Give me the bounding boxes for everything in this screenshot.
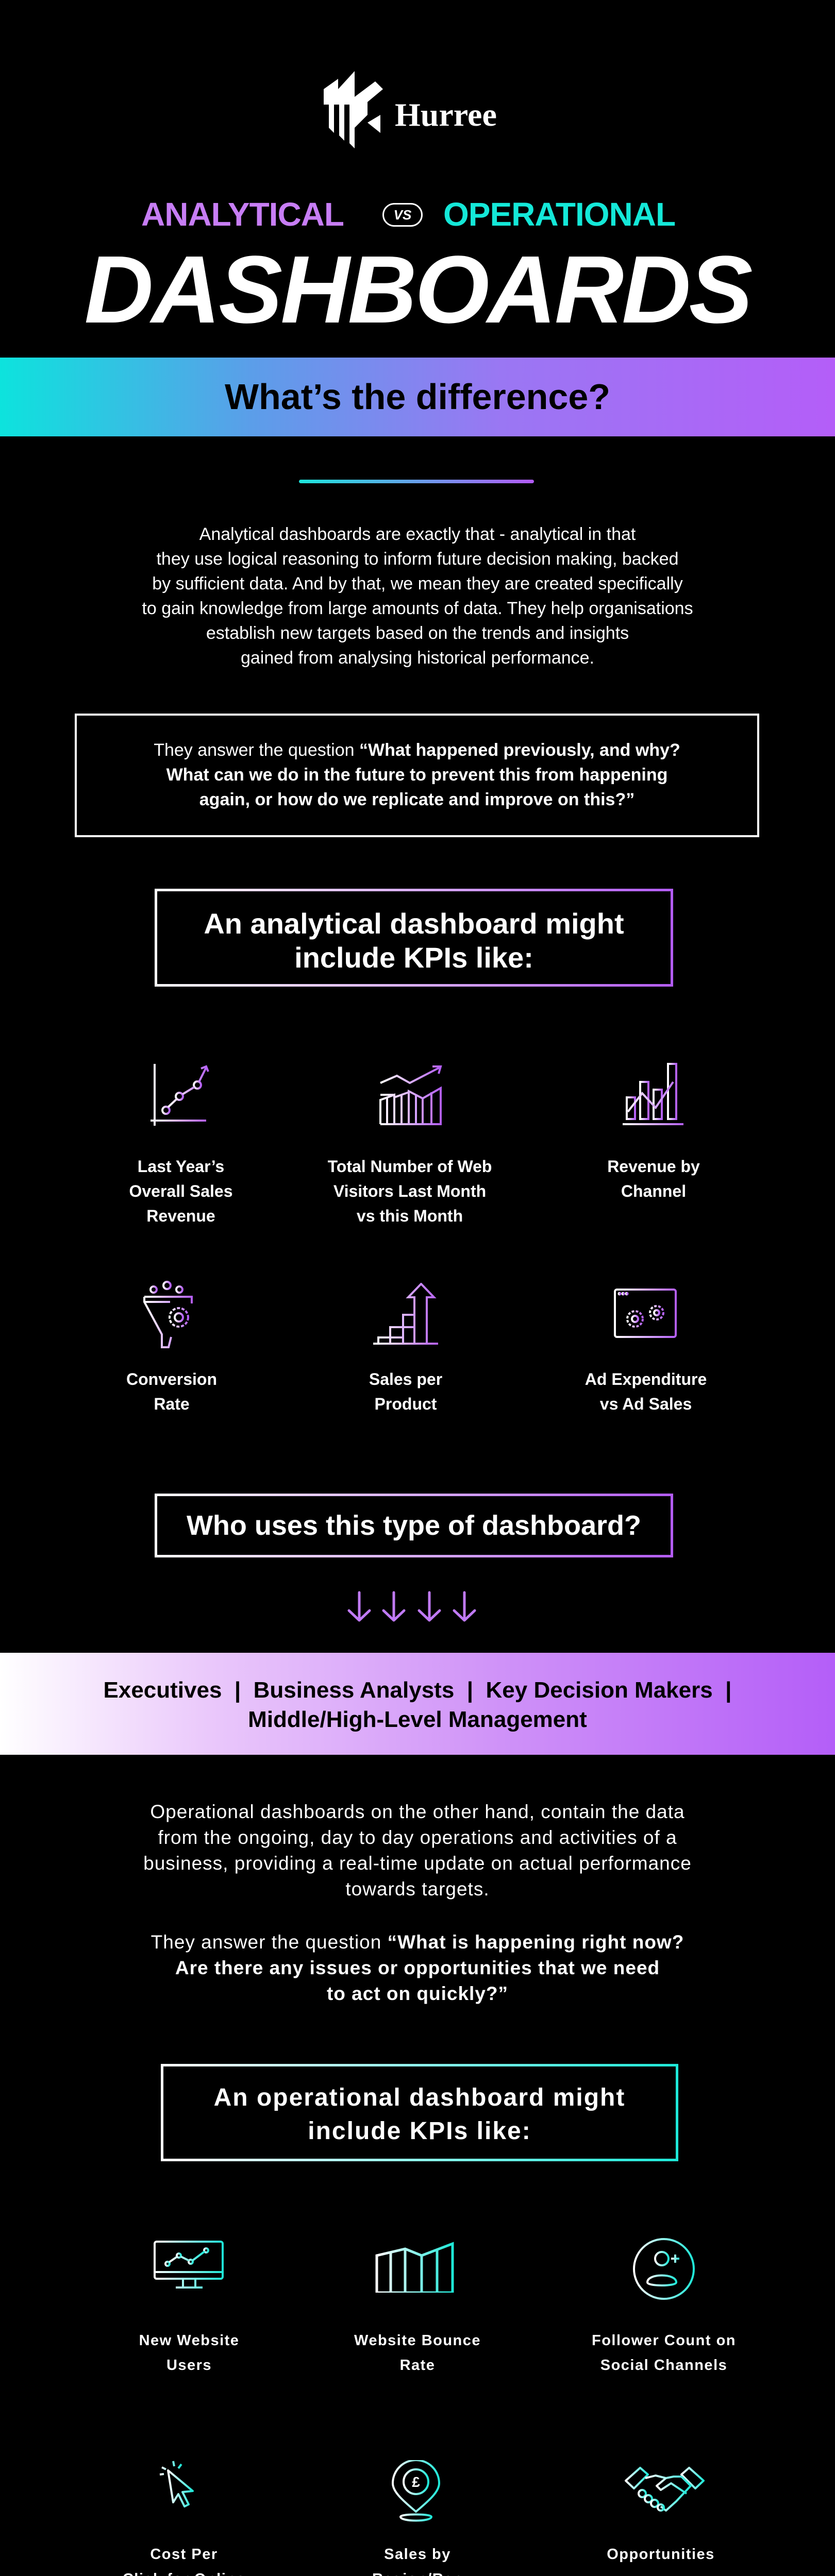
label: Website Bounce Rate: Rate xyxy=(400,2357,435,2374)
text: analytical description: gained from analysing historical performance. xyxy=(241,648,594,668)
text: operational question: Are there any issues or opportunities that we need xyxy=(175,1957,660,1978)
label: Last Year's Overall Sales Revenue: Overall Sales xyxy=(129,1182,233,1200)
callout: analytical question: again, or how do we replicate and improve on this?” xyxy=(199,790,634,809)
text: analytical description xyxy=(142,524,693,668)
label: Follower Count on Social Channels xyxy=(592,2332,736,2374)
label: Revenue by Channel: Revenue by xyxy=(607,1157,700,1176)
label: New Website Users: New Website xyxy=(139,2332,239,2349)
callout: analytical question: They answer the question “What happened previously, and why? xyxy=(154,740,680,760)
label: Conversion Rate: Conversion xyxy=(126,1370,217,1388)
label: Last Year's Overall Sales Revenue xyxy=(129,1157,233,1225)
icon: location pound xyxy=(392,2460,440,2521)
title: analytical vs operational xyxy=(141,196,675,233)
label: Cost Per Click: Cost Per xyxy=(150,2546,218,2563)
label: Conversion Rate xyxy=(126,1370,217,1413)
label: Total Number of Web Visitors: Visitors Last Month xyxy=(333,1182,486,1200)
logo: Hurree top xyxy=(324,71,497,148)
heading box: operational KPIs: include KPIs like: xyxy=(308,2117,531,2145)
label: Cost Per Click xyxy=(123,2546,245,2576)
icon: handshake xyxy=(625,2467,705,2512)
heading box: analytical KPIs: include KPIs like: xyxy=(294,941,533,974)
label: Website Bounce Rate: Website Bounce xyxy=(354,2332,481,2349)
heading box: analytical KPIs: An analytical dashboard might xyxy=(204,907,624,940)
logo: Hurree top: Hurree xyxy=(395,96,497,133)
label: New Website Users: Users xyxy=(166,2357,212,2374)
label: Sales per Product: Sales per xyxy=(369,1370,442,1388)
text: analytical description: they use logical reasoning to inform future decision making, backed xyxy=(156,549,678,569)
label: Sales by Region/Rep: Sales by xyxy=(384,2546,451,2563)
heading box: who uses analytical xyxy=(155,1494,673,1557)
title: analytical vs operational: VS xyxy=(394,207,411,223)
label: Ad Expenditure vs Ad Sales: vs Ad Sales xyxy=(600,1395,692,1413)
banner: What's the difference xyxy=(0,358,835,436)
heading box: who uses analytical: Who uses this type of dashboard? xyxy=(187,1510,641,1541)
text: operational description xyxy=(143,1801,692,1900)
divider line gradient xyxy=(299,480,534,483)
icon: sales per product staircase xyxy=(373,1283,438,1345)
icon: revenue bars xyxy=(623,1063,683,1125)
label: Opportunities: Opportunities xyxy=(607,2546,715,2563)
label: Sales by Region/Rep xyxy=(372,2546,463,2576)
label: Sales per Product xyxy=(369,1370,442,1413)
icon: line chart growth xyxy=(151,1064,209,1126)
text: operational question: They answer the question “What is happening right now? xyxy=(151,1931,684,1953)
icon: location pound: £ xyxy=(412,2474,420,2490)
label: Revenue by Channel xyxy=(607,1157,700,1200)
label: Revenue by Channel: Channel xyxy=(621,1182,686,1200)
banner: What's the difference: What’s the difference? xyxy=(225,377,610,417)
label: Follower Count on Social Channels: Follower Count on xyxy=(592,2332,736,2349)
heading box: operational KPIs: An operational dashboard might xyxy=(214,2084,625,2111)
band: analytical users: Executives | Business Analysts | Key Decision Makers | xyxy=(104,1677,731,1703)
label: Last Year's Overall Sales Revenue: Last Year’s xyxy=(138,1157,224,1176)
icon: follower add xyxy=(633,2238,695,2300)
label: Website Bounce Rate xyxy=(354,2332,481,2374)
icon: bounce rate bars xyxy=(375,2242,454,2293)
label: Last Year's Overall Sales Revenue: Revenue xyxy=(146,1207,215,1225)
band: analytical users xyxy=(0,1653,835,1755)
text: operational description: from the ongoing, day to day operations and activities of a xyxy=(158,1827,677,1848)
icon: conversion funnel xyxy=(143,1281,193,1348)
text: analytical description: by sufficient data. And by that, we mean they are created specifically xyxy=(152,574,683,594)
callout: analytical question xyxy=(75,714,759,837)
text: operational description: business, providing a real-time update on actual performance xyxy=(143,1853,692,1874)
title: analytical vs operational: ANALYTICAL xyxy=(141,196,344,233)
text: operational question: to act on quickly?” xyxy=(327,1983,508,2004)
label: New Website Users xyxy=(139,2332,239,2374)
arrows: purple down xyxy=(347,1591,476,1622)
label: Ad Expenditure vs Ad Sales xyxy=(585,1370,707,1413)
heading box: analytical KPIs xyxy=(155,889,673,987)
text: operational description: Operational dashboards on the other hand, contain the data xyxy=(150,1801,685,1822)
icon: cursor click xyxy=(160,2461,194,2508)
label: Conversion Rate: Rate xyxy=(154,1395,190,1413)
callout: analytical question: What can we do in the future to prevent this from happening xyxy=(166,765,667,785)
title: DASHBOARDS: DASHBOARDS xyxy=(84,236,751,343)
icon: monitor with chart xyxy=(154,2241,224,2289)
label: Ad Expenditure vs Ad Sales: Ad Expenditure xyxy=(585,1370,707,1388)
text: analytical description: to gain knowledge from large amounts of data. They help organisations xyxy=(142,599,693,618)
band: analytical users: Middle/High-Level Management xyxy=(248,1707,587,1732)
label: Total Number of Web Visitors: Total Number of Web xyxy=(328,1157,492,1176)
text: operational description: towards targets. xyxy=(345,1878,490,1900)
text: analytical description: establish new targets based on the trends and insights xyxy=(206,623,629,643)
label: Follower Count on Social Channels: Social Channels xyxy=(600,2357,727,2374)
icon: bar chart with trend xyxy=(379,1065,442,1125)
heading box: operational KPIs xyxy=(161,2064,678,2161)
label: Total Number of Web Visitors: vs this Month xyxy=(357,1207,463,1225)
icon: ad window with gears xyxy=(614,1289,677,1338)
text: analytical description: Analytical dashboards are exactly that - analytical in that xyxy=(199,524,636,544)
label: Sales per Product: Product xyxy=(375,1395,437,1413)
title: analytical vs operational: OPERATIONAL xyxy=(443,196,675,233)
label: Total Number of Web Visitors xyxy=(328,1157,492,1225)
text: operational question xyxy=(151,1931,684,2004)
